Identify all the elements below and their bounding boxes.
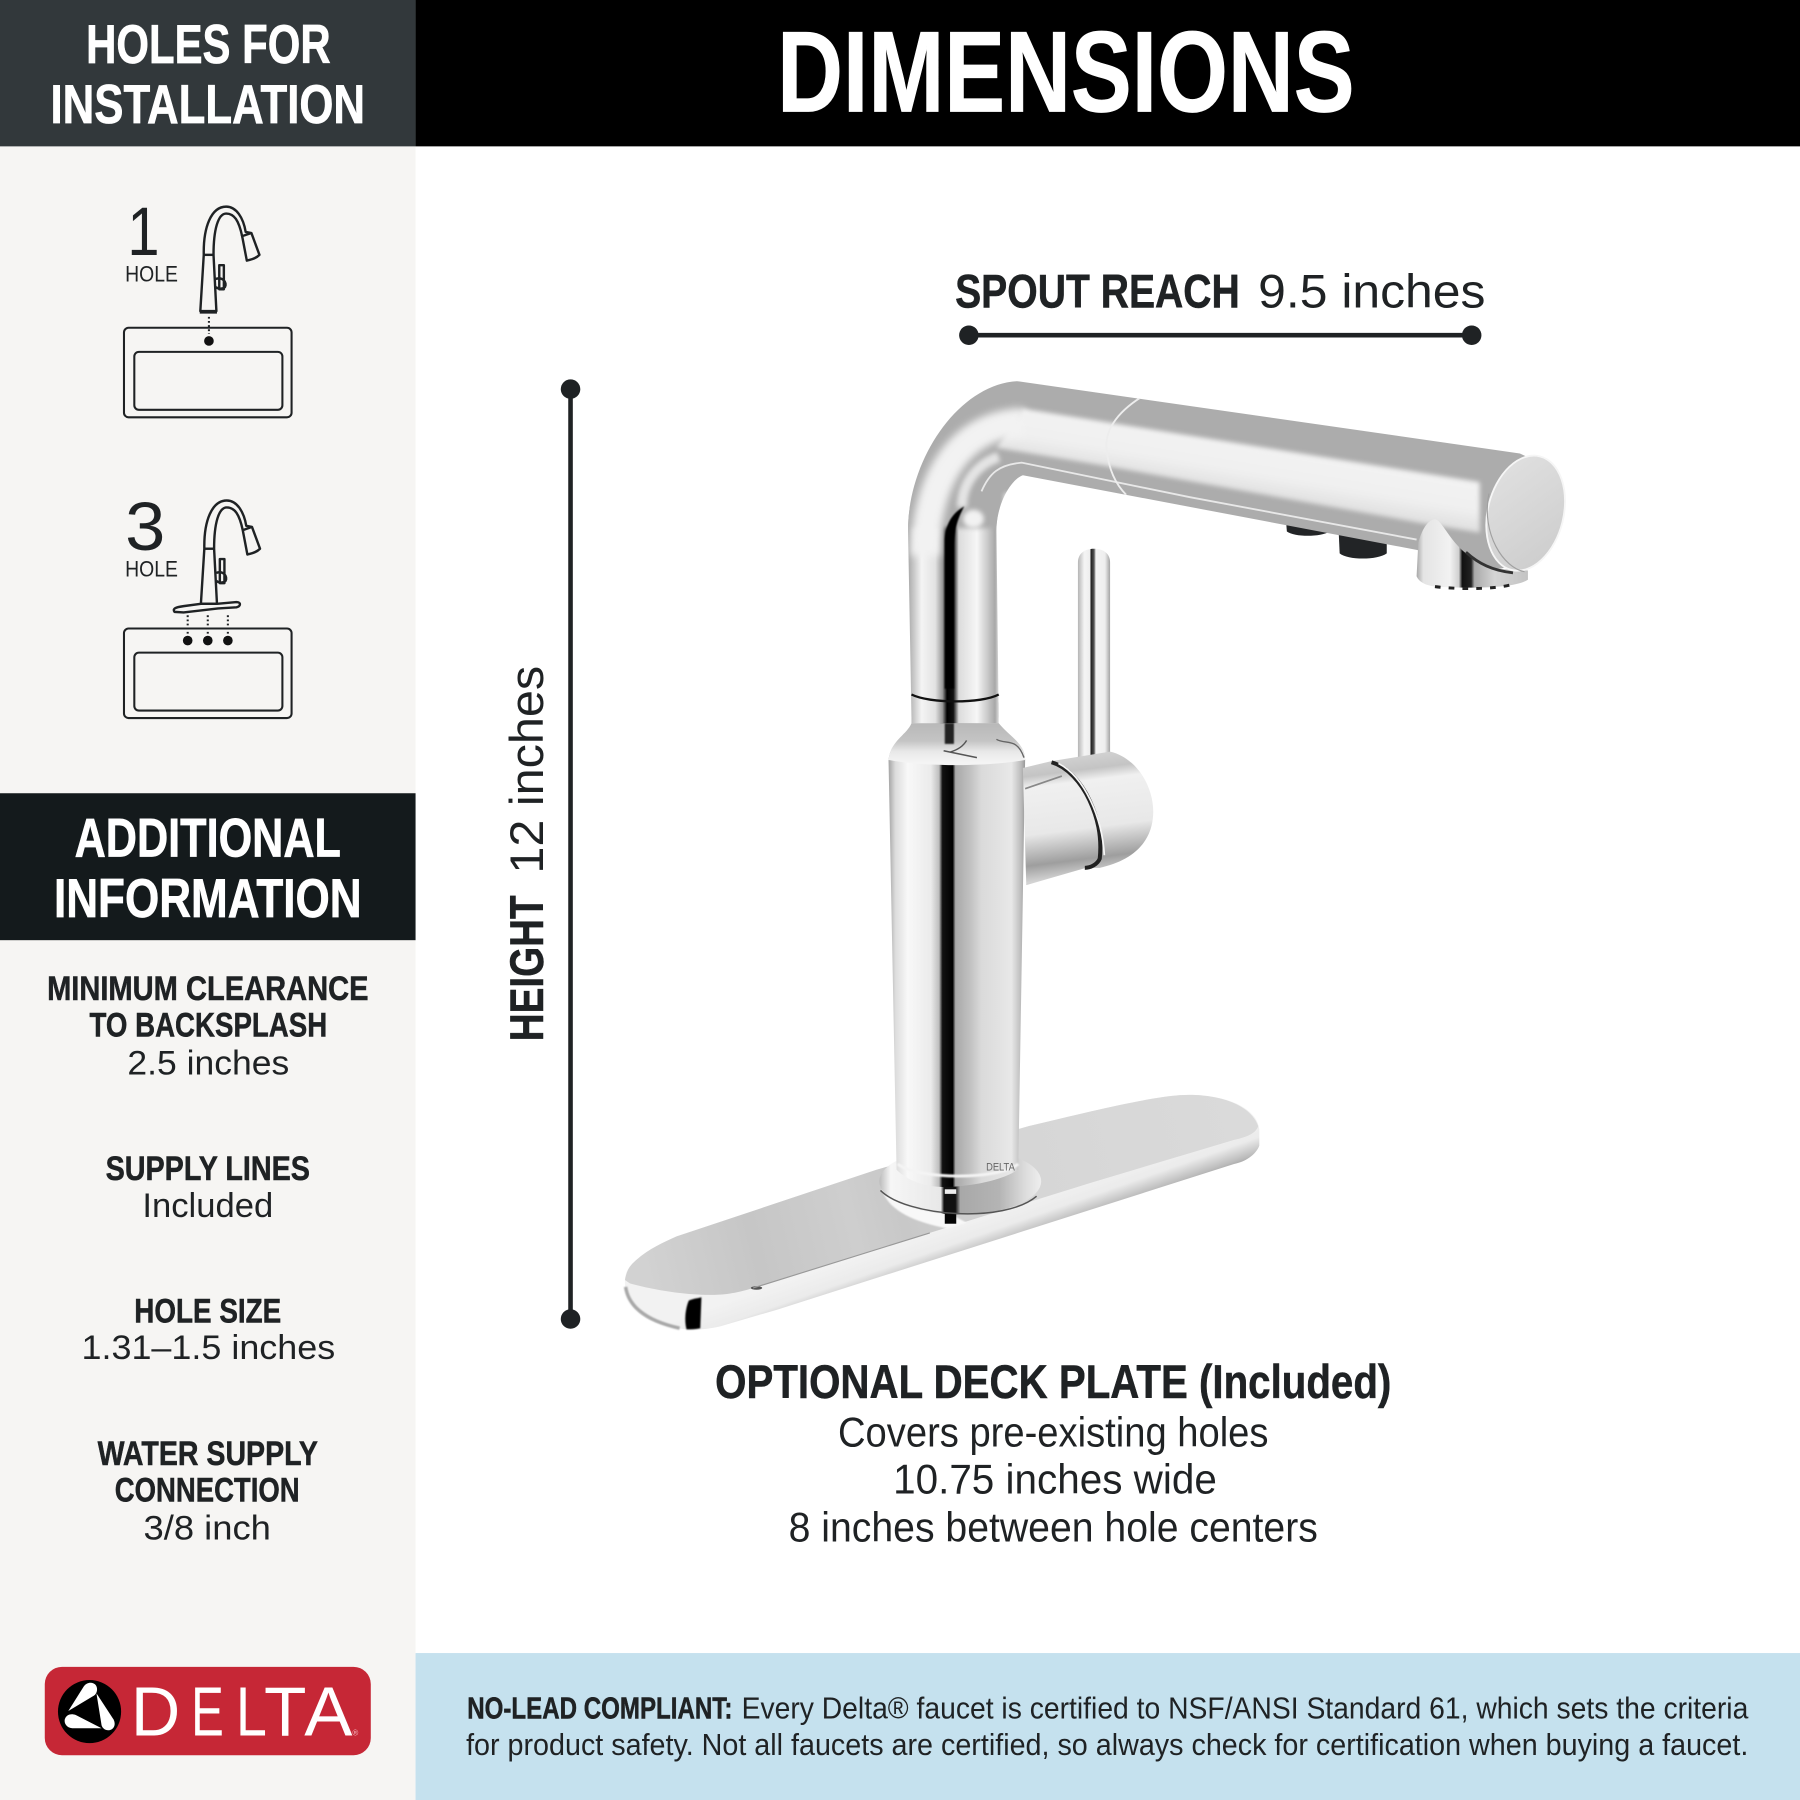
text block: optional deck plate: Covers pre-existing holes: [838, 1409, 1268, 1455]
spout end cap: [1475, 447, 1577, 579]
text block: hole size: 1.31–1.5 inches: [82, 1329, 335, 1367]
spout and neck tube: [908, 381, 1526, 718]
icon: delta triangle mark: [58, 1680, 121, 1743]
deck plate: [625, 1095, 1259, 1330]
callout: no-lead compliant: Every Delta® faucet is certified to NSF/ANSI Standard 61, which sets the criteria: [742, 1691, 1748, 1725]
logo: delta: D: [131, 1673, 180, 1751]
dimension: spout reach: [955, 265, 1485, 345]
column: [889, 723, 1025, 1187]
text block: supply lines: Included: [142, 1187, 273, 1225]
logo: delta: A: [304, 1673, 353, 1751]
icon: faucet line drawing: [200, 207, 259, 312]
callout: no-lead compliant: for product safety. Not all faucets are certified, so always check for certification when buying a faucet.: [466, 1728, 1748, 1762]
illustration: chrome pull-out faucet: [625, 367, 1607, 1330]
panel: left sidebar background: [0, 0, 416, 1800]
dimension: height: 12 inches: [500, 666, 553, 874]
text block: optional deck plate: [715, 1355, 1391, 1551]
text block: supply lines: [106, 1150, 310, 1225]
text block: water supply connection: [98, 1435, 318, 1547]
logo: delta: ®: [352, 1729, 358, 1738]
text block: minimum clearance: MINIMUM CLEARANCE: [47, 970, 368, 1008]
text block: supply lines: SUPPLY LINES: [106, 1150, 310, 1188]
text block: water supply connection: CONNECTION: [115, 1472, 300, 1510]
callout: no-lead compliant: NO-LEAD COMPLIANT:: [467, 1691, 732, 1725]
label: 1 hole: [125, 193, 178, 286]
text block: minimum clearance: [47, 970, 368, 1082]
handle lever: [1078, 549, 1110, 762]
logo: delta: L: [236, 1673, 267, 1751]
title: dimensions: DIMENSIONS: [777, 8, 1355, 136]
callout: no-lead compliant: [416, 1653, 1800, 1800]
logo: delta: [45, 1667, 371, 1755]
label: 1 hole: HOLE: [125, 261, 178, 286]
heading: additional information: [0, 793, 416, 940]
title: dimensions: [416, 0, 1800, 146]
spray nozzle: [1417, 519, 1528, 589]
dimension: height: HEIGHT: [500, 895, 553, 1041]
handle body: [1023, 752, 1153, 885]
column: DELTA: [986, 1161, 1015, 1173]
text block: hole size: [82, 1292, 335, 1367]
text block: optional deck plate: 10.75 inches wide: [893, 1456, 1217, 1502]
text block: hole size: HOLE SIZE: [134, 1292, 281, 1330]
text block: optional deck plate: OPTIONAL DECK PLATE (Included): [715, 1355, 1391, 1408]
heading: additional information: INFORMATION: [54, 867, 362, 929]
icon: sink with three holes: [124, 615, 292, 718]
heading: holes for installation: INSTALLATION: [51, 73, 365, 135]
logo: delta: T: [264, 1673, 307, 1751]
heading: holes for installation: [0, 0, 416, 146]
dimension: spout reach: 9.5 inches: [1258, 265, 1485, 318]
base ring: [879, 1148, 1041, 1215]
plate reflection: [882, 1189, 967, 1228]
label: 1 hole: 1: [127, 193, 160, 270]
text block: water supply connection: 3/8 inch: [143, 1509, 271, 1547]
dimension: spout reach: SPOUT REACH: [955, 265, 1240, 318]
panel: 3 hole installation: [124, 488, 292, 718]
label: 3 hole: [125, 488, 178, 581]
heading: additional information: ADDITIONAL: [75, 806, 341, 868]
text block: minimum clearance: TO BACKSPLASH: [90, 1007, 327, 1045]
text block: water supply connection: WATER SUPPLY: [98, 1435, 318, 1473]
heading: holes for installation: HOLES FOR: [86, 13, 331, 75]
label: 3 hole: HOLE: [125, 556, 178, 581]
black hose nubs: [1286, 517, 1387, 558]
icon: faucet line drawing with deck plate: [174, 501, 260, 612]
text block: minimum clearance: 2.5 inches: [127, 1044, 289, 1082]
dimension: height: [500, 379, 580, 1329]
label: 3 hole: 3: [125, 488, 165, 565]
text block: optional deck plate: 8 inches between hole centers: [789, 1505, 1318, 1551]
panel: 1 hole installation: [124, 193, 292, 417]
icon: sink with one hole: [124, 317, 292, 417]
faucet collar: [911, 695, 999, 726]
logo: delta: E: [191, 1673, 224, 1751]
